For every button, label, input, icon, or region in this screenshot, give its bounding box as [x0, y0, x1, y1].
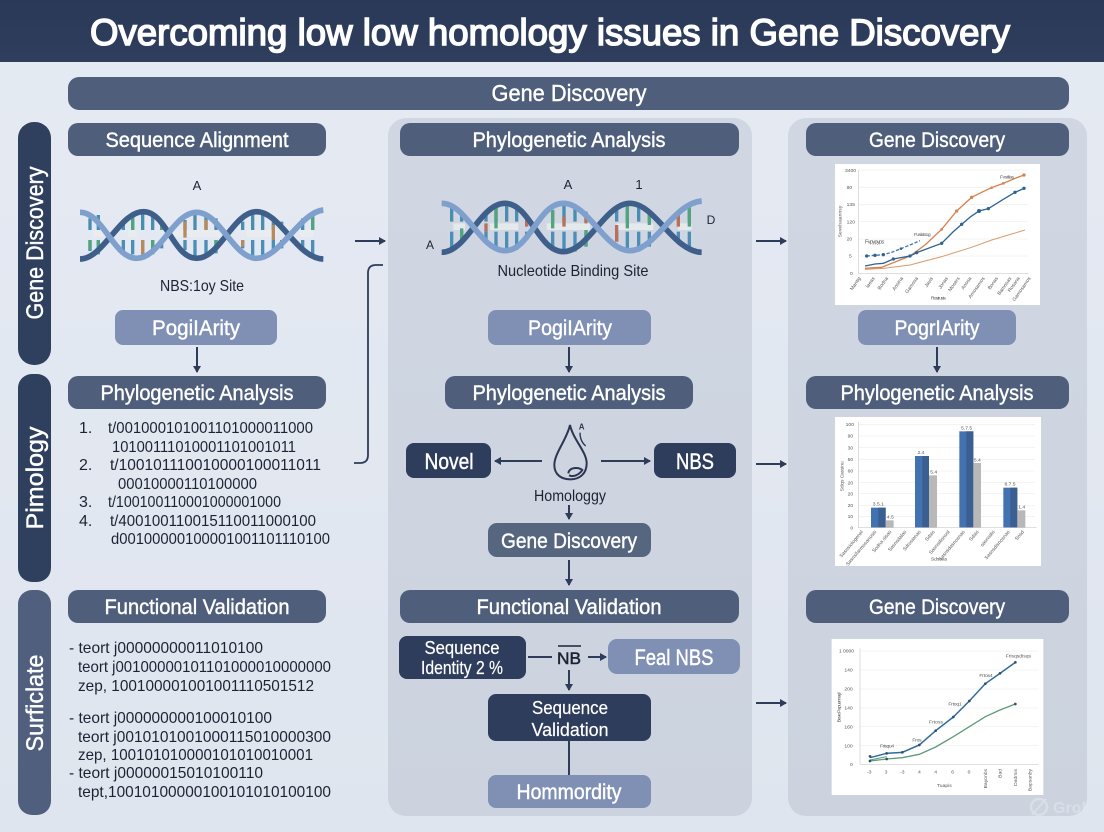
arrow: down [568, 670, 570, 690]
line chart: top: 135 [847, 202, 855, 208]
center heading: Phylogenetic Analysis: Phylogenetic Analysis [472, 129, 666, 152]
box: Sequence Validation: Sequence [532, 698, 608, 718]
bar chart: 1.4 [1018, 505, 1025, 511]
line chart: top: Fusistoog [914, 232, 931, 238]
line chart: bottom: Frtoq1 [948, 702, 962, 708]
line chart: bottom: 4 [934, 769, 937, 775]
line chart: top: 5 [849, 254, 852, 260]
line chart: top: Amosamos [967, 276, 987, 300]
center heading: Phylogenetic Analysis [400, 123, 739, 156]
text block: sequence records: - teort j00000015010100110 [69, 765, 263, 782]
top banner: Gene Discovery: Gene Discovery [492, 80, 647, 106]
bar chart: Sasnsdisnosl [928, 529, 952, 556]
sidebar: Surficlate: Surficlate [22, 654, 49, 752]
line chart: top: Sevelsaannsy [838, 205, 844, 237]
text block: numbered sequences: 00010000110100000 [118, 476, 257, 493]
line chart: bottom: 6 [951, 769, 954, 775]
line chart: top: 20 [847, 237, 852, 243]
line chart: top: Gamosa [904, 276, 920, 295]
bar chart: 20 [848, 480, 853, 486]
label: NBS site: NBS:1oy Site [160, 278, 244, 295]
pill: Gene Discovery [488, 523, 651, 557]
line chart: bottom [832, 639, 1043, 795]
header band with title [0, 0, 1104, 62]
pill: right Pogi|Arity [858, 310, 1016, 345]
bar chart: sasnsdis [979, 529, 997, 548]
bar chart: Sdiqs Cassinu [839, 461, 845, 491]
box: Sequence Validation [488, 694, 651, 741]
line chart: top: Jonas [937, 276, 950, 290]
box: NBS [654, 443, 736, 478]
pill: Hommordity: Hommordity [516, 781, 622, 804]
bar chart: 30 [848, 445, 853, 451]
sidebar: Pimology [18, 374, 51, 582]
labels around center helix: A [426, 238, 434, 252]
label: A: A [193, 178, 202, 193]
pill: Pogi|Arity [115, 310, 277, 345]
bar chart: 50 [848, 457, 853, 463]
line chart: top: Bonas [987, 276, 1000, 291]
connector bracket [354, 265, 383, 463]
line chart: bottom: 140 [844, 706, 853, 712]
sidebar: Gene Discovery [18, 122, 51, 365]
sidebar: Gene Discovery: Gene Discovery [22, 166, 49, 320]
bar chart: Sasnsifarmosanosis [845, 529, 879, 567]
line chart: top: Mantig [849, 276, 863, 292]
labels around center helix: A [564, 177, 573, 192]
line chart: bottom: Tuapis [937, 783, 952, 789]
bar chart: 60 [848, 469, 853, 475]
text block: numbered sequences: t/100101110010000100011011 [110, 457, 321, 474]
bar chart: 5.7.5 [961, 425, 972, 431]
bar chart: 90 [848, 434, 853, 440]
line chart: top: Javis [924, 276, 935, 289]
line chart: top: 3400 [845, 168, 856, 174]
right heading: Phylogenetic Analysis [806, 376, 1069, 409]
line chart: top: Rosirusis [931, 295, 946, 301]
line chart: top: Aosina [891, 276, 905, 292]
bar chart: 100 [846, 422, 854, 428]
line chart: bottom: Bapsanby [1028, 768, 1034, 791]
icon: homology drop: A [579, 422, 585, 431]
line chart: bottom: Frisqsdisqs [1006, 654, 1031, 660]
text block: sequence records: zep, 100101010000101010010001 [78, 747, 313, 764]
text block: numbered sequences: 1. [79, 420, 92, 437]
center heading: Functional Validation [400, 590, 739, 623]
column 1 heading: Sequence Alignment [68, 123, 326, 156]
line chart: top: 80 [847, 185, 852, 191]
text block: numbered sequences: 10100111010001101001011 [112, 439, 296, 456]
text block: sequence records [69, 640, 331, 801]
icon: DNA helix center [442, 201, 702, 252]
bar chart: Sasnsdasnosnas [938, 529, 967, 562]
line chart: bottom: 0 [850, 762, 853, 768]
bar chart: Sasnsdisnosnas [984, 529, 1012, 561]
line chart: top: laeas [865, 276, 877, 289]
arrow: column 1 to center [355, 240, 385, 242]
line chart: bottom: Dadrsis [1013, 769, 1019, 786]
bar chart: Sasnsdalas [887, 529, 909, 553]
right heading: Gene Discovery lower [806, 590, 1069, 623]
pill: Feal NBS [608, 639, 740, 674]
bar chart: Sdssas [931, 557, 948, 563]
box: Sequence Identity [399, 636, 526, 679]
sidebar: Pimology: Pimology [22, 427, 49, 529]
bar chart: Sdsis [924, 529, 937, 543]
bar chart: Sodna sisas [871, 529, 894, 554]
text block: numbered sequences: 4. [79, 513, 92, 530]
line chart: top: Anosa [960, 276, 973, 291]
right heading: Gene Discovery lower: Gene Discovery [869, 596, 1005, 619]
bar chart: 20 [848, 491, 853, 497]
arrow: down [936, 347, 938, 372]
bar chart: 20 [848, 503, 853, 509]
line chart: top: Fvstilas [1000, 174, 1014, 180]
arrow: down [568, 505, 570, 519]
line chart: bottom: 100 [844, 743, 853, 749]
text block: numbered sequences: t/001000101001101000011000 [108, 420, 313, 437]
text block: numbered sequences: t/400100110015110011000100 [110, 513, 316, 530]
line chart: bottom: Frtoss [929, 720, 943, 726]
text block: numbered sequences [79, 420, 330, 548]
labels around center helix: 1 [635, 177, 643, 192]
bar chart: 2.4 [918, 450, 925, 456]
box: NBS: NBS [676, 449, 714, 474]
column 1 heading: Functional Validation: Functional Validation [104, 596, 290, 619]
line chart: bottom: 200 [844, 687, 853, 693]
text block: sequence records: tept,10010100000100101010100100 [78, 784, 331, 801]
text block: numbered sequences: 3. [79, 494, 92, 511]
header band with title: Overcoming low low homology issues in Gene Discovery [90, 12, 1010, 53]
arrow: down [568, 560, 570, 585]
arrows: center to right [756, 241, 786, 703]
line chart: bottom: Bayonbs [983, 768, 989, 788]
text block: sequence records: teort j0010101001000115010000300 [78, 729, 331, 746]
line chart: top [835, 164, 1040, 305]
line chart: bottom: 1 0000 [839, 649, 854, 655]
icon: DNA helix left [80, 210, 323, 259]
box: Novel [406, 443, 491, 478]
arrow: to Novel [495, 460, 542, 462]
bar chart: Sasnsiologenel [839, 529, 865, 559]
bar chart: 5.4 [930, 469, 937, 475]
right heading: Phylogenetic Analysis: Phylogenetic Analysis [840, 382, 1034, 405]
watermark: Grok [1031, 799, 1090, 817]
column 1 heading: Phylogenetic Analysis [68, 376, 326, 409]
line chart: top: 120 [847, 219, 855, 225]
pill: Feal NBS: Feal NBS [634, 645, 714, 670]
line chart: bottom: -3 [867, 769, 872, 775]
label: Homology: Homologgy [534, 488, 606, 505]
text block: numbered sequences: 2. [79, 457, 92, 474]
bar chart: 3.5.1 [873, 502, 884, 508]
line chart: bottom: Bad [998, 769, 1004, 778]
panel: center column background [388, 118, 752, 816]
panel: right column background [788, 118, 1087, 816]
bar chart: 0 [850, 525, 853, 531]
sidebar: Surficlate [18, 590, 51, 815]
column 1 heading: Sequence Alignment: Sequence Alignment [106, 129, 289, 152]
box: Novel: Novel [424, 449, 474, 474]
line chart: bottom: 140 [844, 668, 853, 674]
top banner: Gene Discovery [68, 77, 1069, 110]
arrow: to Feal NBS [588, 656, 606, 658]
line chart: bottom: Beve Papuannayl [837, 692, 843, 722]
pill: right Pogi|Arity: PogrIArity [894, 317, 980, 340]
line chart: bottom: -3 [900, 769, 905, 775]
bar chart: 5.4 [974, 457, 981, 463]
label: Nucleotide Binding Site: Nucleotide Binding Site [498, 263, 649, 280]
column 1 heading: Phylogenetic Analysis: Phylogenetic Analysis [100, 382, 294, 405]
pill: Gene Discovery: Gene Discovery [501, 530, 637, 553]
pill: Pogi|Arity: PogiIArity [152, 317, 240, 340]
box: Sequence Identity: Sequence [424, 638, 500, 658]
right heading: Gene Discovery [806, 123, 1069, 156]
line chart: bottom: 4 [918, 769, 921, 775]
center pill: Phylogenetic Analysis [445, 376, 693, 409]
bar chart: Snsd [1014, 529, 1026, 542]
arrow: down [568, 741, 570, 775]
text block: sequence records: zep, 100100001001001110501512 [78, 678, 314, 695]
bar chart: 8.7.5 [1004, 482, 1016, 488]
icon: homology drop [554, 422, 587, 479]
line chart: top: Bamosas [996, 276, 1014, 297]
line chart: top: Mosers [947, 276, 962, 293]
labels around center helix: D [707, 213, 716, 227]
line chart: top: 0 [850, 271, 853, 277]
pill: center Pogi|Arity: PogiIArity [528, 317, 612, 340]
bar chart: 10 [848, 514, 853, 520]
box: Sequence Identity: Identity 2 % [421, 658, 503, 678]
labels around center helix [426, 177, 716, 252]
arrow: down [196, 347, 198, 372]
column 1 heading: Functional Validation [68, 590, 326, 623]
line chart: bottom: Frtos4 [979, 673, 993, 679]
line chart: bottom: 0 [968, 769, 971, 775]
line chart: bottom: Fros [912, 738, 922, 744]
line chart: top: Fvpypyps [865, 239, 885, 245]
line chart: bottom: 160 [844, 724, 853, 730]
watermark: Grok: Grok [1053, 800, 1090, 817]
text block: sequence records: - teort j000000000100010100 [69, 710, 272, 727]
connector line [528, 656, 552, 658]
bar chart: 4.5 [887, 515, 894, 521]
pill: Hommordity [488, 775, 651, 808]
text block: numbered sequences: t/100100110001000001000 [108, 494, 281, 511]
text block: sequence records: teort j00100000101101000010000000 [78, 659, 331, 676]
line chart: bottom: Frisqu4 [880, 744, 894, 750]
text block: numbered sequences: d00100000100001001101110100 [111, 531, 330, 548]
bar chart: Sdrosianas [902, 529, 923, 552]
center heading: Functional Validation: Functional Validation [476, 596, 662, 619]
label: NB: NB [557, 649, 581, 668]
line chart: top: Rosana [1007, 276, 1022, 294]
arrow: down [568, 347, 570, 372]
pill: center Pogi|Arity [488, 310, 651, 345]
arrow: to NBS [601, 460, 650, 462]
line chart: bottom: 3 [885, 769, 888, 775]
line chart: top: Gamosamos [1012, 276, 1033, 303]
line chart: top: Bodna [877, 276, 890, 291]
right heading: Gene Discovery: Gene Discovery [869, 129, 1005, 152]
box: Sequence Validation: Validation [532, 720, 608, 740]
center pill: Phylogenetic Analysis: Phylogenetic Analysis [472, 382, 666, 405]
bar chart [835, 417, 1041, 567]
text block: sequence records: - teort j00000000011010100 [69, 640, 263, 657]
bar chart: Sdsis [968, 529, 981, 543]
